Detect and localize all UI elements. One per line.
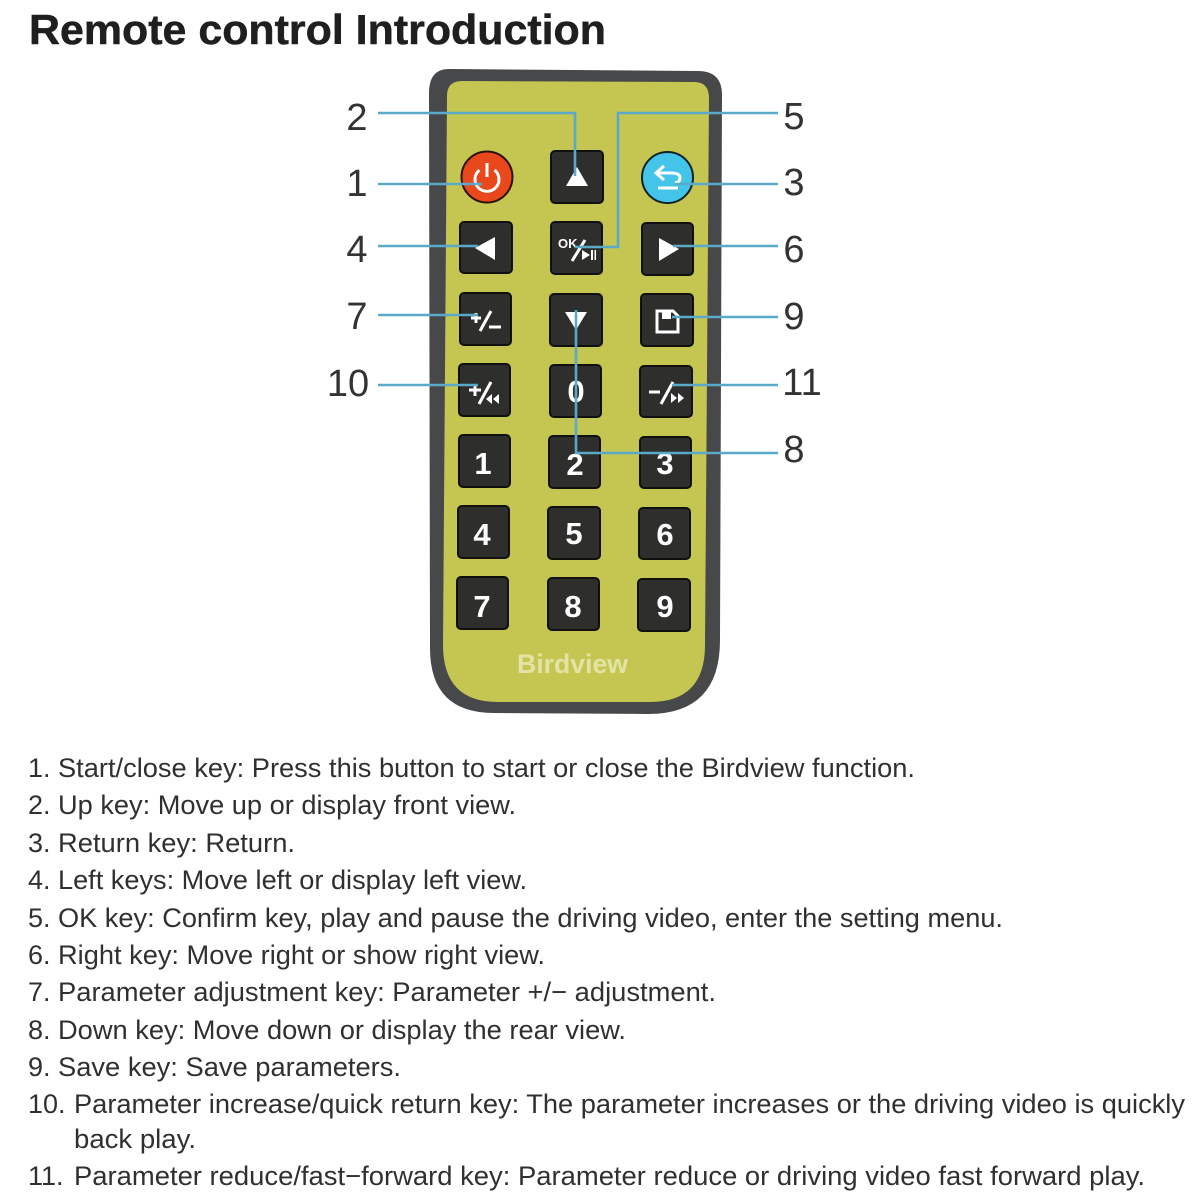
remote body — [429, 69, 722, 714]
key: 7 — [457, 577, 508, 629]
key: 5 — [548, 507, 600, 559]
item 7: Parameter adjustment key: Parameter +/− adjustment. — [58, 977, 716, 1007]
callout numbers left: 4 — [346, 229, 368, 271]
key: 3 — [640, 437, 691, 488]
item 5: 5. — [28, 903, 51, 933]
item 10: 10. — [28, 1089, 66, 1119]
item 1: Start/close key: Press this button to start or close the Birdview function. — [58, 753, 915, 783]
item 1: 1. — [28, 753, 51, 783]
item 4: 4. — [28, 865, 51, 895]
key description list — [28, 753, 1185, 1191]
key: plus minus — [460, 293, 511, 345]
key: 9 — [638, 579, 690, 631]
item 6: 6. — [28, 940, 51, 970]
key: 6: 6 — [656, 517, 674, 552]
key: 8 — [548, 578, 599, 630]
callout numbers right: 3 — [783, 162, 805, 204]
callout numbers right: 11 — [782, 362, 822, 404]
key: power — [462, 152, 512, 202]
item 9: 9. — [28, 1052, 51, 1082]
key: left — [460, 222, 512, 273]
key: down — [550, 294, 602, 346]
callout lines — [378, 113, 778, 453]
item 11: 11. — [28, 1161, 64, 1191]
key: 1 — [459, 435, 510, 487]
callout numbers left: 2 — [346, 97, 368, 139]
item 8: Down key: Move down or display the rear view. — [58, 1015, 626, 1045]
key: 8: 8 — [564, 589, 582, 624]
key: 2: 2 — [566, 447, 584, 482]
item 4: Left keys: Move left or display left view. — [58, 865, 527, 895]
key: 2 — [549, 436, 600, 488]
key: up — [551, 151, 603, 203]
item 5: OK key: Confirm key, play and pause the driving video, enter the setting menu. — [58, 903, 1003, 933]
item 9: Save key: Save parameters. — [58, 1052, 401, 1082]
item 11: Parameter reduce/fast−forward key: Parameter reduce or driving video fast forward play. — [74, 1161, 1145, 1191]
callout numbers right: 6 — [783, 229, 805, 271]
item 3: Return key: Return. — [58, 828, 295, 858]
item 7: 7. — [28, 977, 51, 1007]
callout numbers right: 9 — [783, 296, 805, 338]
remote control — [429, 69, 722, 714]
key: 9: 9 — [656, 589, 674, 624]
callout numbers left: 10 — [327, 363, 369, 405]
item 6: Right key: Move right or show right view. — [58, 940, 545, 970]
key: 0 — [550, 365, 601, 417]
item 2: 2. — [28, 790, 51, 820]
key: OK play pause — [551, 222, 602, 274]
key: return — [642, 152, 693, 203]
item 10: Parameter increase/quick return key: The parameter increases or the driving video is quickly — [74, 1089, 1185, 1119]
key: 5: 5 — [565, 516, 583, 551]
key: 4 — [458, 506, 509, 558]
callout numbers left: 1 — [346, 163, 368, 205]
item 10: back play. — [74, 1124, 196, 1154]
title: Remote control Introduction — [29, 6, 606, 53]
callout numbers right — [782, 96, 822, 471]
key: right — [642, 223, 693, 275]
key: 4: 4 — [473, 517, 491, 552]
item 8: 8. — [28, 1015, 51, 1045]
callout numbers right: 8 — [783, 429, 805, 471]
item 3: 3. — [28, 828, 51, 858]
key: OK play pause: OK — [558, 236, 578, 251]
callout numbers right: 5 — [783, 96, 805, 138]
key: 1: 1 — [474, 446, 492, 481]
brand name: Birdview — [517, 649, 629, 679]
key: minus forward — [640, 366, 692, 417]
key: save — [641, 294, 693, 346]
callout numbers left — [327, 97, 369, 405]
key: 3: 3 — [656, 446, 674, 481]
key: 7: 7 — [473, 589, 491, 624]
key: plus rewind — [459, 364, 510, 416]
key: 0: 0 — [567, 374, 585, 409]
yellow faceplate — [443, 81, 709, 702]
item 2: Up key: Move up or display front view. — [58, 790, 516, 820]
item 10 — [28, 1089, 1185, 1154]
key: 6 — [639, 508, 690, 559]
callout numbers left: 7 — [346, 296, 368, 338]
